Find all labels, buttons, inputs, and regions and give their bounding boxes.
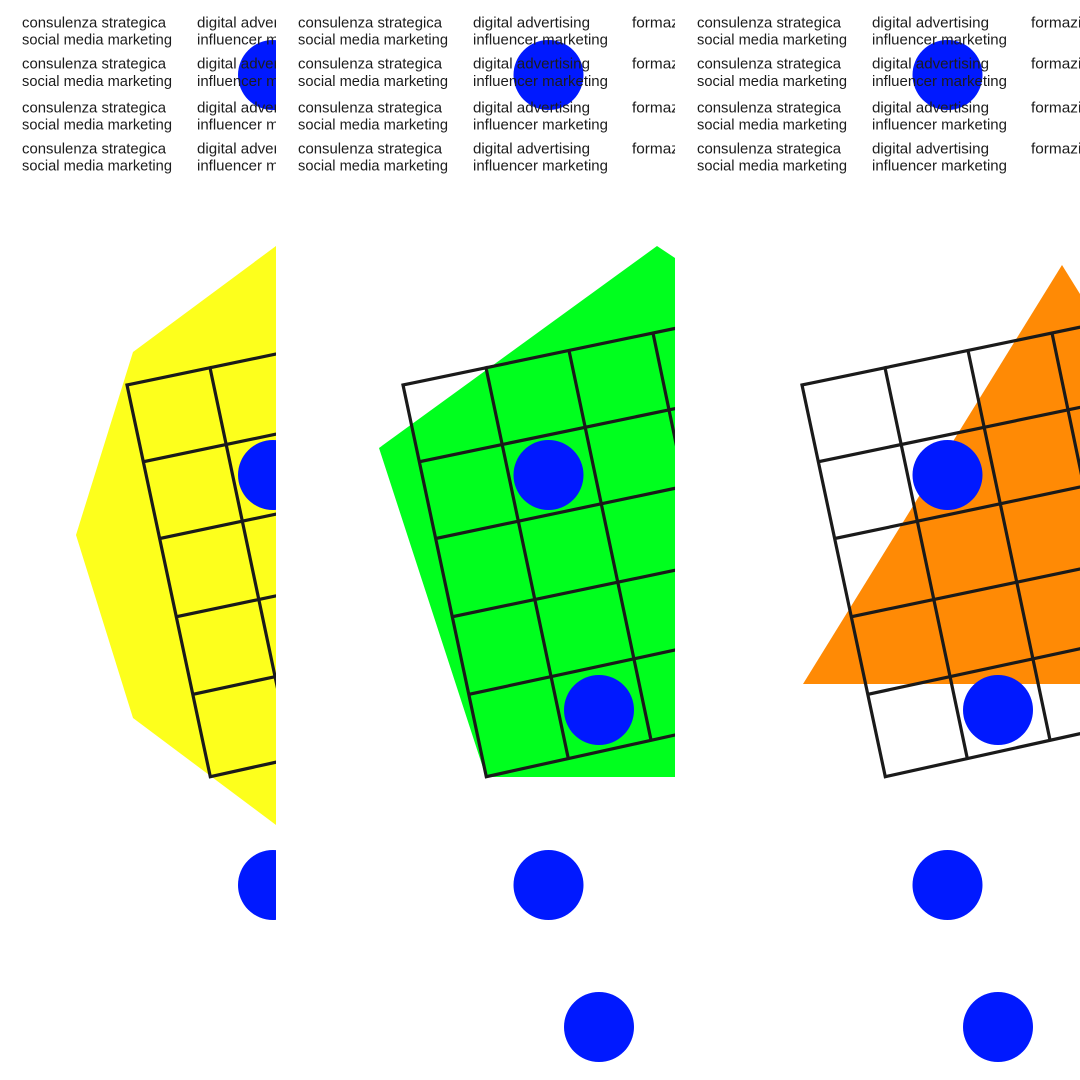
service text rows: digital advertising [473,100,590,116]
panel: orange [697,15,1080,1062]
service text rows: social media marketing [22,32,172,48]
service text rows: influencer marketing [872,158,1007,174]
service text rows: social media marketing [697,158,847,174]
service text rows: consulenza strategica [697,15,842,31]
service text rows: social media marketing [697,32,847,48]
service text rows: influencer marketing [473,117,608,133]
service text rows: consulenza strategica [298,141,443,157]
service text rows [697,15,1080,174]
service text rows: social media marketing [697,117,847,133]
service text rows: influencer marketing [473,32,608,48]
service text rows: influencer marketing [872,32,1007,48]
service text rows: digital advertising [473,15,590,31]
service text rows: social media marketing [22,74,172,90]
line grid [802,312,1080,777]
blue dots [514,40,634,1062]
panel: yellow [22,15,276,920]
green polygon [379,246,675,777]
service text rows: consulenza strategica [298,100,443,116]
service text rows: digital advertising [872,100,989,116]
service text rows: social media marketing [298,158,448,174]
service text rows: digital advertising [872,141,989,157]
blue dots [238,40,308,920]
service text rows: social media marketing [697,74,847,90]
line grid [403,312,756,777]
service text rows: digital advertising [872,56,989,72]
service text rows: social media marketing [22,117,172,133]
service text rows: consulenza strategica [298,15,443,31]
service text rows: social media marketing [298,32,448,48]
service text rows: consulenza strategica [697,100,842,116]
service text rows: social media marketing [298,117,448,133]
service text rows: digital advertising [872,15,989,31]
service text rows: consulenza strategica [697,56,842,72]
line grid [127,312,480,777]
service text rows: social media marketing [298,74,448,90]
service text rows: digital advertising [473,141,590,157]
service text rows: influencer marketing [473,74,608,90]
service text rows: consulenza strategica [22,15,167,31]
blue dots [912,40,1033,1062]
service text rows: consulenza strategica [22,141,167,157]
service text rows: influencer marketing [872,117,1007,133]
service text rows: consulenza strategica [298,56,443,72]
service text rows [22,15,332,174]
service text rows [298,15,708,174]
service text rows: influencer marketing [872,74,1007,90]
yellow polygon [76,246,276,825]
service text rows: influencer marketing [473,158,608,174]
orange triangle [803,265,1080,684]
service text rows: consulenza strategica [22,56,167,72]
service text rows: digital advertising [473,56,590,72]
panel: green [298,15,675,1062]
service text rows: social media marketing [22,158,172,174]
service text rows: consulenza strategica [22,100,167,116]
service text rows: consulenza strategica [697,141,842,157]
